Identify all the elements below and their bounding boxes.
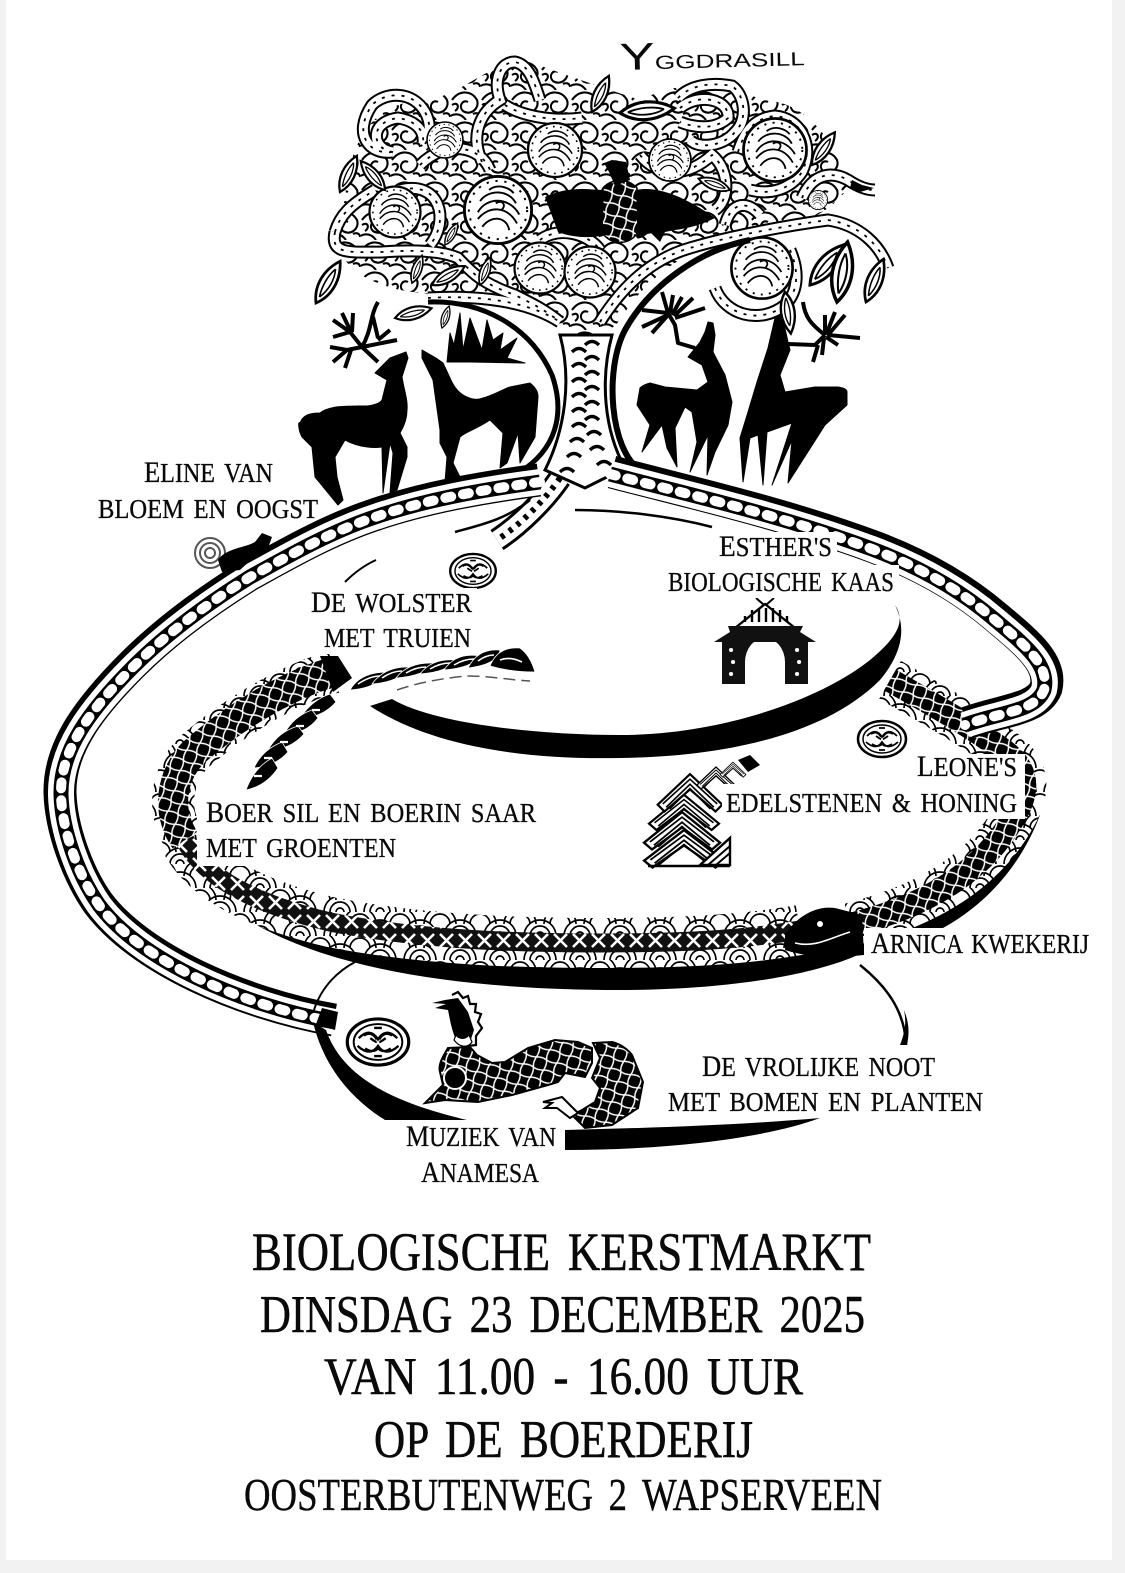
label: Leone's edelstenen en honing: EDELSTENEN & HONING [726,788,1017,818]
label: De wolster met truien: MET TRUIEN [324,623,471,653]
outer ring: right serpent band [610,472,1047,725]
label: Boer Sil en boerin Saar met groenten [197,796,541,866]
label: Esther's biologische kaas: ESTHER'S [719,530,832,563]
label: Arnica kwekerij: ARNICA KWEKERIJ [871,927,1089,960]
eagle body [602,180,638,242]
dragon tail [572,1042,643,1128]
serpent lower body [185,840,800,943]
dragon hip [444,1067,466,1089]
serpent right body [850,680,1024,925]
icon: mountain [644,755,760,868]
label: Boer Sil en boerin Saar met groenten: BOER SIL EN BOERIN SAAR [206,796,536,829]
trunk scale marks [560,342,611,472]
deer 4 [740,302,860,485]
icon: squirrel [195,533,272,572]
midgard serpent [173,672,1024,943]
icon: discs [347,554,906,1065]
label: Boer Sil en boerin Saar met groenten: MET GROENTEN [206,833,396,863]
band end cap [316,1008,338,1030]
tail white marks [358,655,522,684]
tail dashes [397,676,530,690]
label: De vrolijke noot: MET BOMEN EN PLANTEN [668,1087,983,1117]
serpent head [785,908,864,957]
label: Eline van bloem en oogst [98,456,318,524]
thin island lines [314,500,906,1045]
crown serpent bands [334,62,888,322]
black wedge [320,656,352,692]
lower island crescents [313,1010,909,1150]
event address: OOSTERBUTENWEG 2 WAPSERVEEN [244,1469,882,1520]
label: Esther's biologische kaas: BIOLOGISCHE KAAS [668,567,894,597]
upper island crescent [370,605,901,758]
event title: BIOLOGISCHE KERSTMARKT [252,1222,871,1282]
label: Leone's edelstenen en honing: LEONE'S [917,750,1017,783]
deer 2 [422,313,538,482]
eagle head [604,160,630,186]
label: Muziek van Anamesa [400,1120,562,1189]
tree trunk and roots [428,240,750,540]
tail leaves [350,648,535,690]
label: De wolster met truien: DE WOLSTER [311,586,472,619]
roses [370,118,828,299]
deer 1 [299,302,408,505]
deer 3 [637,292,732,475]
label: De vrolijke noot [668,1050,983,1117]
dragon [425,992,643,1128]
dragon foot [543,1097,578,1118]
event place: OP DE BOERDERIJ [374,1411,753,1469]
icon: eagle [545,160,715,242]
event date: DINSDAG 23 DECEMBER 2025 [260,1286,865,1344]
lower root [455,478,560,540]
event time: VAN 11.00 - 16.00 UUR [324,1348,804,1406]
label: De wolster met truien [305,586,477,654]
lower crescents under serpent [185,815,1040,990]
label: Eline van bloem en oogst: BLOEM EN OOGST [98,494,318,524]
dragon head and neck [432,998,474,1042]
left arch [428,302,558,492]
label: Muziek van Anamesa: MUZIEK VAN [406,1120,556,1153]
serpent left body [173,672,335,840]
serpent tip [850,180,874,192]
label: Esther's biologische kaas [662,530,899,598]
deer silhouettes [299,292,860,505]
world tree crown [309,62,890,335]
event information [244,1222,882,1520]
label: Leone's edelstenen en honing [722,750,1025,819]
trunk [545,335,625,488]
right arch [613,240,750,470]
serpent fin tail [320,648,535,692]
label: Muziek van Anamesa: ANAMESA [421,1156,539,1189]
title: Yggdrasill: Y ggdrasill [619,32,805,79]
outer ring: left serpent band [60,480,540,1022]
crown foliage texture [337,62,850,335]
fin leaf eyes [254,710,320,776]
label: De vrolijke noot: DE VROLIJKE NOOT [702,1050,935,1083]
dragon crest [452,992,482,1046]
dragon collar [454,1035,472,1046]
eagle wings [545,189,605,237]
leaves [309,73,890,335]
icon: gate house [714,598,816,684]
dragon body [425,1040,592,1103]
label: Eline van bloem en oogst: ELINE VAN [144,456,273,489]
serpent lower fin leaves [246,694,336,790]
